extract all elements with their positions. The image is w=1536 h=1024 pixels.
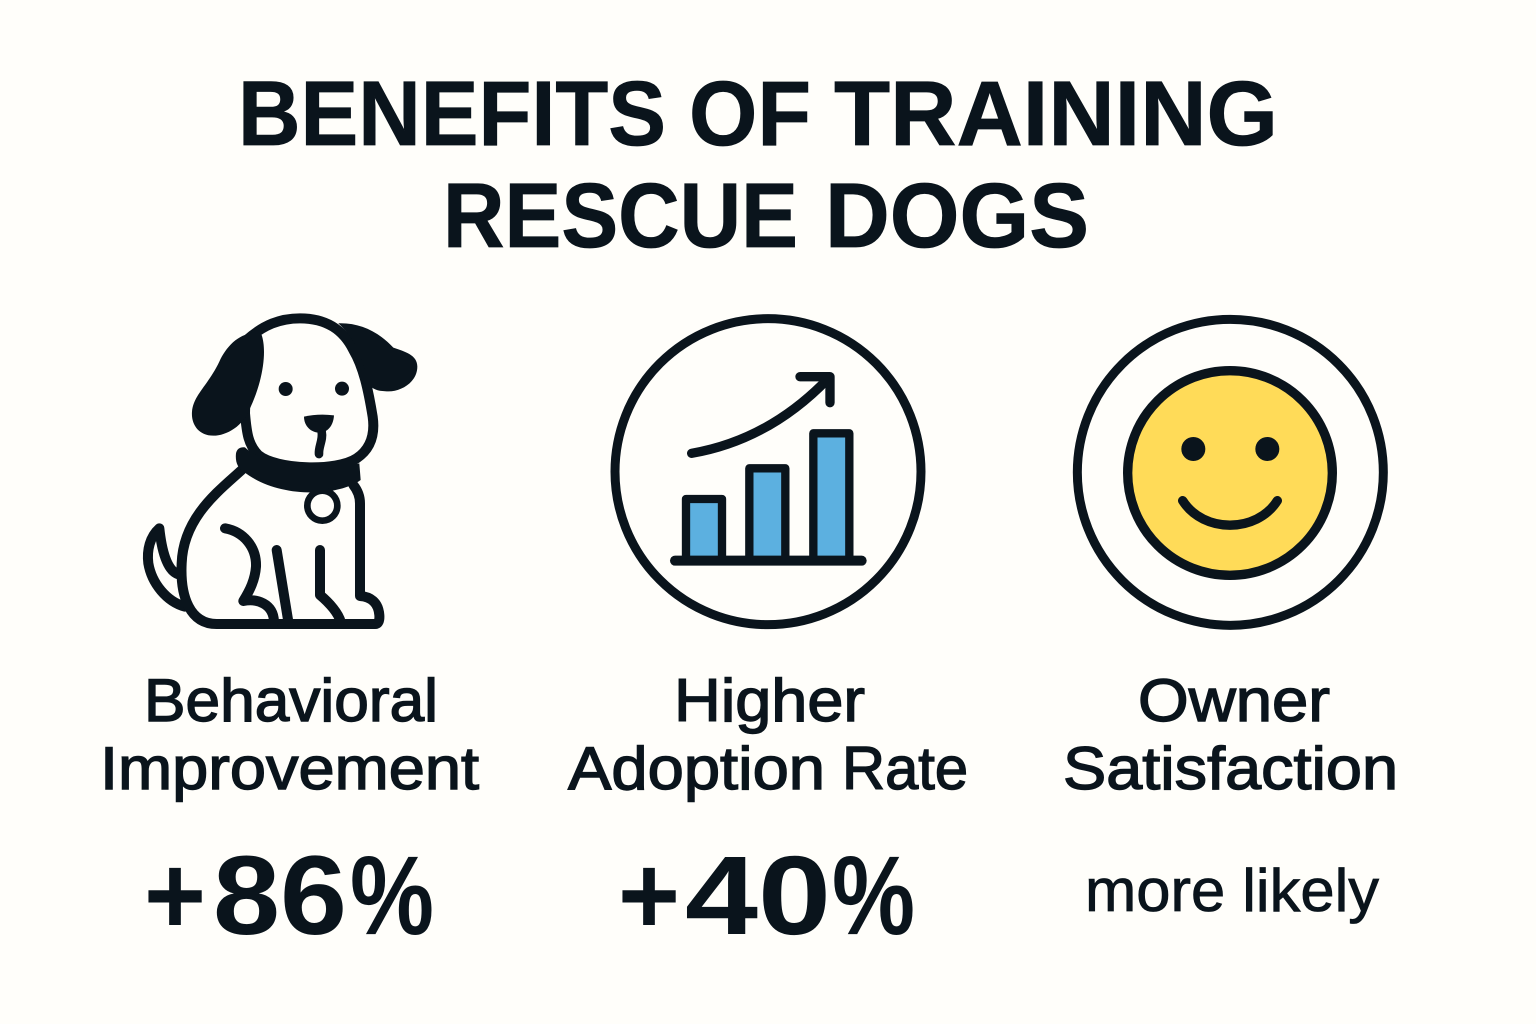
label: owner satisfaction [1063,667,1398,802]
title: RESCUE [443,165,798,267]
label: higher adoption rate: Adoption [568,735,825,802]
stat: more likely: more likely [1085,857,1379,924]
label: owner satisfaction: Satisfaction [1063,735,1398,802]
stat: +40%: % [832,833,915,958]
title: BENEFITS [238,63,666,165]
label: behavioral improvement: Behavioral [144,667,438,734]
stat: +86%: + [144,833,206,958]
panel: higher adoption rate [568,319,968,958]
label: owner satisfaction: Owner [1138,667,1330,734]
icon: rising bar chart in circle [615,319,921,625]
label: behavioral improvement [100,667,479,802]
stat: +86%: % [350,833,434,958]
panel: owner satisfaction [1063,319,1398,924]
title: OF [689,63,811,165]
stat: +40%: 40 [685,833,831,958]
label: higher adoption rate [568,667,968,802]
icon: smiley in circle [1077,319,1383,625]
title: DOGS [825,165,1089,267]
label: higher adoption rate: Higher [674,667,865,734]
label: behavioral improvement: Improvement [100,735,479,802]
panel: behavioral improvement [100,318,479,958]
stat: +86%: 86 [213,833,347,958]
label: higher adoption rate: Rate [842,735,968,802]
title: TRAINING [834,63,1278,165]
title [238,63,1278,267]
icon: sitting dog [148,318,417,624]
stat: +40%: + [618,833,680,958]
